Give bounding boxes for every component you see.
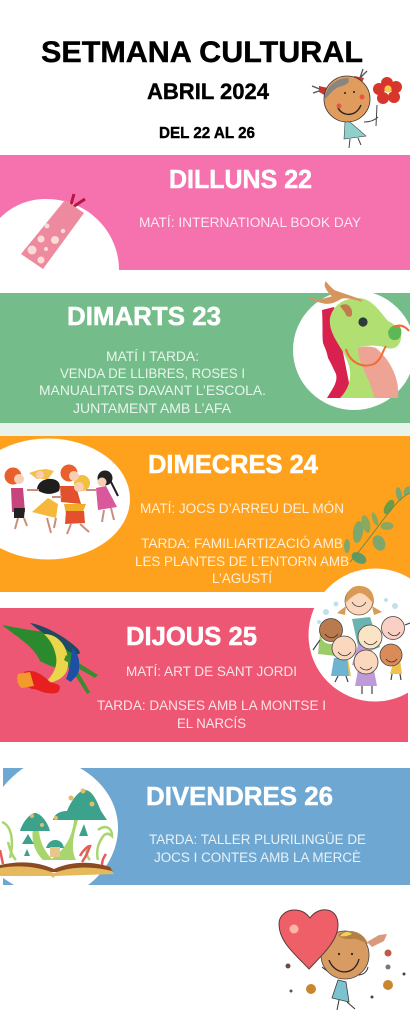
panel: Friday (0, 768, 410, 885)
heading: DIMECRES 24 (148, 449, 319, 479)
icon: bookmark (21, 194, 85, 269)
title block (41, 36, 363, 142)
activity text: VENDA DE LLIBRES, ROSES I (60, 366, 245, 382)
activity text: JOCS I CONTES AMB LA MERCÈ (154, 849, 361, 866)
icon: girl with heart (279, 910, 406, 1010)
activity text: MATÍ: JOCS D’ARREU DEL MÓN (140, 500, 344, 517)
icon: group of children (313, 586, 410, 694)
heading: DIVENDRES 26 (146, 781, 333, 811)
activity text: JUNTAMENT AMB L’AFA (73, 401, 232, 417)
icon: mushroom book (0, 788, 114, 878)
heading: DILLUNS 22 (169, 164, 312, 194)
activity text: TARDA: DANSES AMB LA MONTSE I (97, 698, 326, 714)
activity text (149, 830, 366, 866)
activity text (135, 500, 349, 587)
white circle (293, 290, 410, 410)
activity text: MATÍ: INTERNATIONAL BOOK DAY (139, 214, 362, 231)
white circle (0, 199, 119, 270)
heading: DIJOUS 25 (126, 621, 257, 651)
panel: Monday (0, 155, 410, 270)
title block: ABRIL 2024 (147, 79, 269, 104)
icon: girl with flower (312, 69, 402, 148)
activity text: EL NARCÍS (177, 715, 246, 732)
title block: DEL 22 AL 26 (159, 125, 255, 142)
icon: leaves (344, 485, 410, 566)
heading: DIMARTS 23 (67, 301, 221, 331)
activity text: MATÍ I TARDA: (106, 348, 199, 365)
white ellipse (3, 768, 118, 885)
activity text (97, 663, 326, 732)
title block: SETMANA CULTURAL (41, 36, 363, 69)
icon: children dancing (4, 464, 118, 534)
activity text: TARDA: FAMILIARTIZACIÓ AMB (141, 535, 343, 552)
activity text: LES PLANTES DE L’ENTORN AMB (135, 554, 349, 570)
activity text: L’AGUSTÍ (212, 570, 272, 587)
panel: Tuesday (0, 283, 410, 436)
activity text: TARDA: TALLER PLURILINGÜE DE (149, 830, 366, 848)
white circle (308, 568, 410, 702)
activity text: MANUALITATS DAVANT L’ESCOLA. (39, 383, 266, 399)
icon: paint splash (2, 623, 98, 694)
panel: Thursday (0, 568, 410, 742)
activity text: MATÍ: ART DE SANT JORDI (126, 663, 297, 680)
panel: Wednesday (0, 436, 410, 592)
white ellipse (0, 438, 130, 560)
icon: dragon (310, 283, 409, 398)
activity text (39, 348, 266, 417)
